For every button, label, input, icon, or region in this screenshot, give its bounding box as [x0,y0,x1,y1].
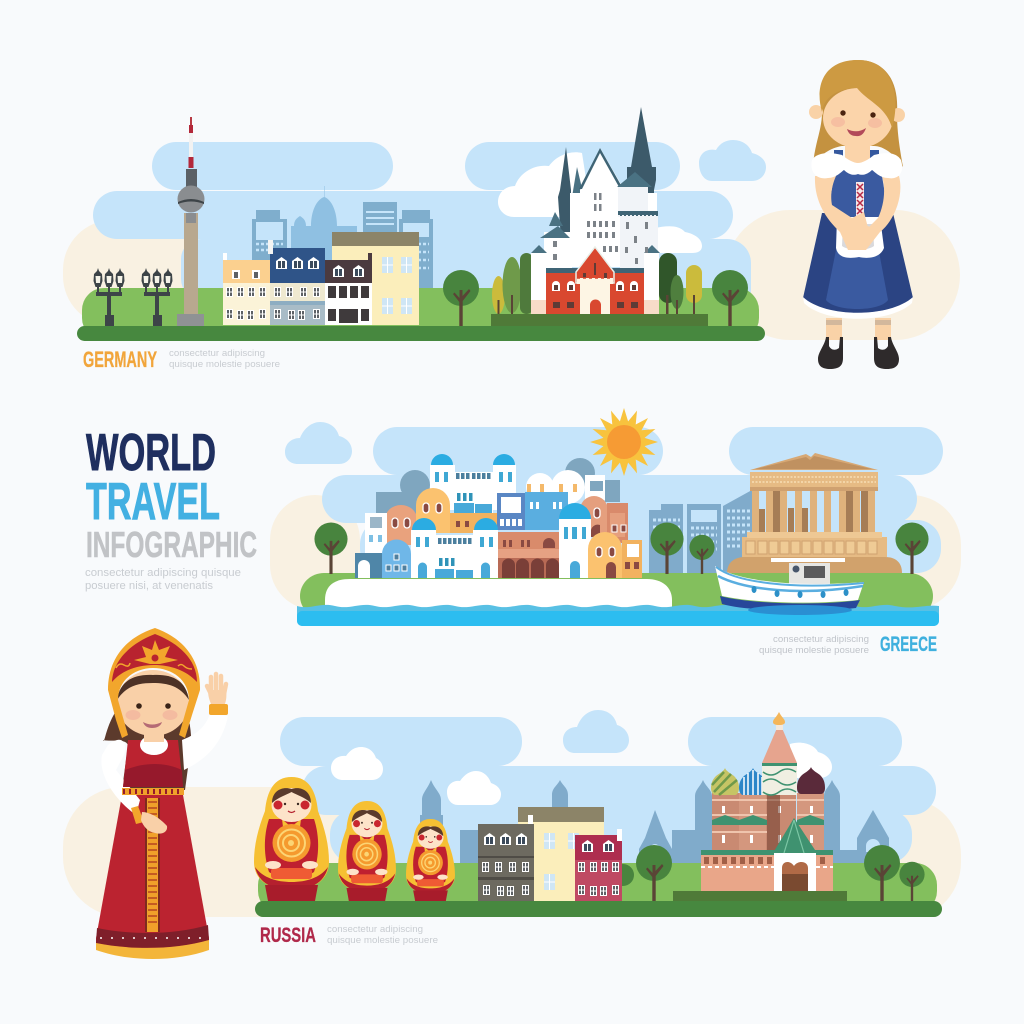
background skyline Russia [420,780,889,863]
German houses [223,232,419,325]
label: Germany: consectetur adipiscing [169,348,265,359]
ground Russia [255,863,942,917]
title block: WORLD [86,424,216,482]
icon: street lamps [94,268,172,326]
label: Greece: quisque molestie posuere [759,645,869,656]
label: Germany: GERMANY [83,347,157,372]
background skyline Greece [649,490,752,573]
label: Germany [83,347,280,372]
title block: posuere nisi, at venenatis [85,580,214,592]
panel: Germany [63,60,960,372]
title block: TRAVEL [86,473,220,531]
label: Russia: consectetur adipiscing [327,924,423,935]
icon: Saint Basil's cathedral [673,712,847,901]
Greece scenery backdrop [270,422,961,619]
icon: Parthenon [727,453,902,573]
icon: Neuschwanstein castle [491,107,708,326]
label: Russia: RUSSIA [260,924,316,947]
trees Greece [314,522,929,574]
icon: harbour building [789,563,830,587]
panel: Greece [270,408,961,656]
title block [85,424,257,592]
icon: German woman in dirndl [803,60,913,369]
trees Germany [443,253,748,326]
label: Russia [260,924,438,947]
icon: boat [715,566,864,615]
Russia scenery backdrop [63,710,961,917]
label: Germany: quisque molestie posuere [169,359,280,370]
label: Greece: consectetur adipiscing [773,634,869,645]
icon: Berlin TV tower [177,117,204,326]
panel: Russia [63,628,961,959]
trees Russia [636,845,925,901]
icon: Russian woman in sarafan [96,628,228,959]
icon: Russian houses [478,807,634,901]
Germany scenery backdrop [63,140,960,341]
water [297,605,939,626]
icon: sun [590,408,658,476]
label: Greece [759,633,937,656]
title block: INFOGRAPHIC [86,524,257,565]
icon: matryoshka dolls [254,777,455,901]
label: Greece: GREECE [880,633,937,656]
background skyline Germany [252,186,433,288]
icon: Santorini village [325,454,672,608]
label: Russia: quisque molestie posuere [327,935,438,946]
title block: consectetur adipiscing quisque [85,567,241,579]
